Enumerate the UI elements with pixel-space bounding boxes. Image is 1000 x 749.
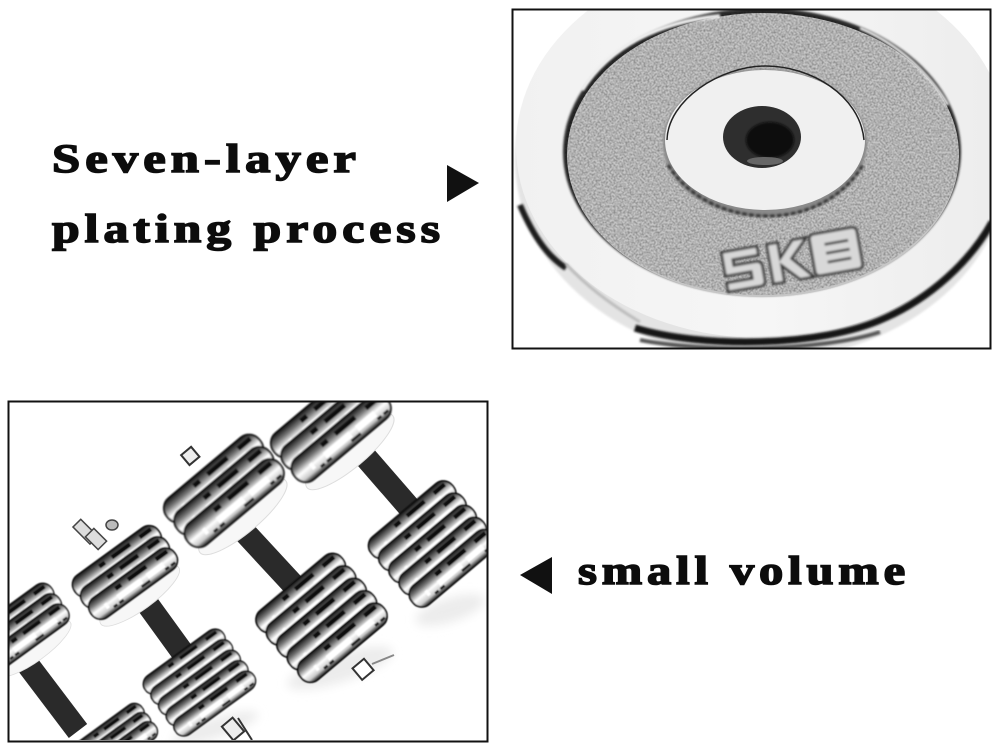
label: small volume: small volume <box>578 548 910 593</box>
arrow: pointing right to plate photo <box>447 165 479 202</box>
heading: seven-layer plating process: Seven-layer <box>52 136 361 181</box>
plate outer rim <box>515 0 1000 360</box>
dumbbell 4 (top right) <box>268 402 486 609</box>
heading: seven-layer plating process: plating process <box>52 206 445 251</box>
dumbbell 2 <box>68 519 259 740</box>
arrow: pointing left to dumbbell photo <box>520 557 552 594</box>
dumbbell 1 (bottom left) <box>10 582 159 740</box>
plate centre boss <box>663 66 867 217</box>
photo panel: dumbbells <box>8 400 488 742</box>
photo panel: chrome weight plate <box>512 0 1000 360</box>
plate centre hole <box>723 106 801 168</box>
spin-lock nut <box>181 447 199 465</box>
plate textured field <box>560 8 965 300</box>
soft shadows <box>175 594 482 740</box>
embossed 5KG mark <box>721 227 863 292</box>
heading: seven-layer plating process <box>52 136 445 251</box>
dumbbell 3 <box>159 429 394 687</box>
